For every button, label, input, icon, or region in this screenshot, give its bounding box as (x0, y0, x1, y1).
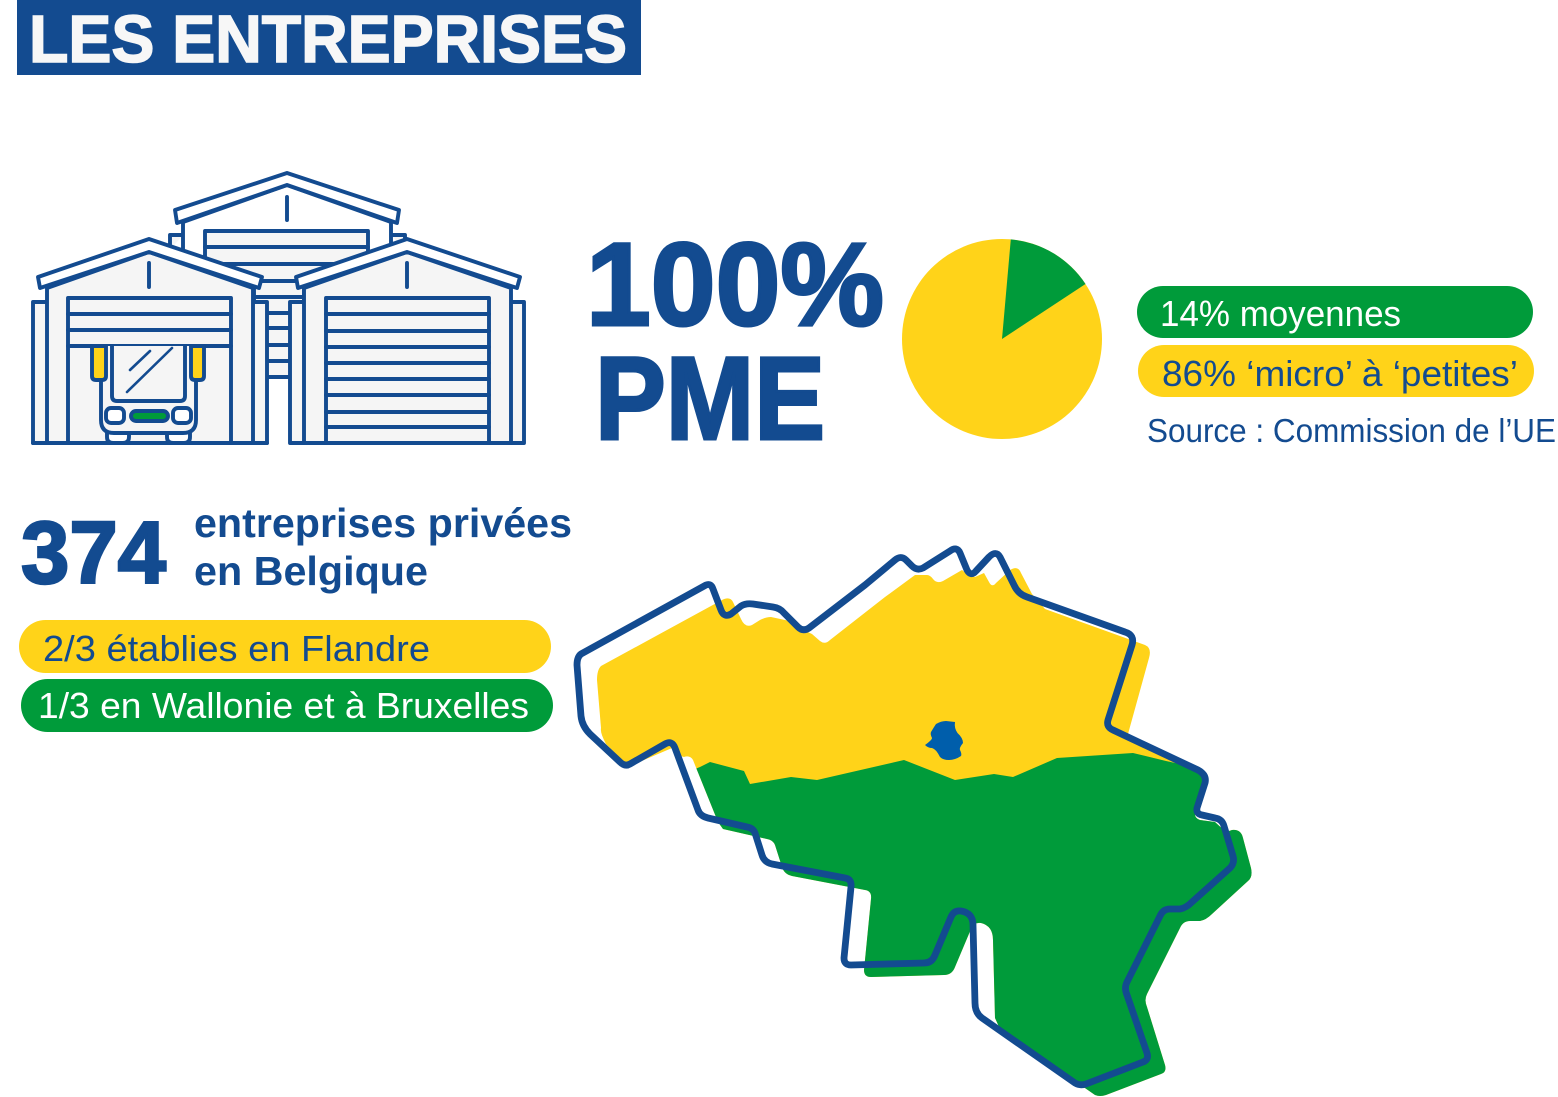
right garage (290, 239, 524, 443)
pie chart (902, 239, 1102, 439)
stat: 374 entreprises: en Belgique (194, 548, 428, 594)
region: Flanders (597, 568, 1252, 1096)
bus (92, 346, 204, 443)
icon: garages with bus (33, 173, 524, 443)
back warehouse (170, 173, 405, 377)
border outline (577, 549, 1234, 1085)
stat: 374 entreprises: entreprises privées (194, 500, 572, 546)
pill: 2/3 en Flandre: 2/3 établies en Flandre (43, 628, 430, 669)
legend pill: 14% moyennes (1137, 286, 1533, 338)
legend pill: 14% moyennes: 14% moyennes (1160, 293, 1401, 334)
pill: 1/3 Wallonie et Bruxelles (21, 679, 553, 732)
heading: 100% PME (586, 219, 884, 465)
left garage (33, 239, 267, 443)
heading: 100% PME: PME (595, 333, 825, 465)
stat: 374 entreprises: 374 (21, 503, 166, 602)
title: LES ENTREPRISES (29, 2, 627, 77)
pill: 1/3 Wallonie et Bruxelles: 1/3 en Wallonie et à Bruxelles (38, 685, 529, 726)
map of Belgium (577, 549, 1252, 1096)
stat: 374 entreprises (21, 500, 572, 602)
region: Wallonia (696, 753, 1252, 1096)
legend pill: 86% micro à petites (1138, 345, 1534, 397)
heading: 100% PME: 100% (586, 219, 884, 351)
region: Brussels (925, 721, 963, 760)
legend pill: 86% micro à petites: 86% ‘micro’ à ‘petites’ (1162, 353, 1518, 394)
pill: 2/3 en Flandre (19, 620, 551, 673)
